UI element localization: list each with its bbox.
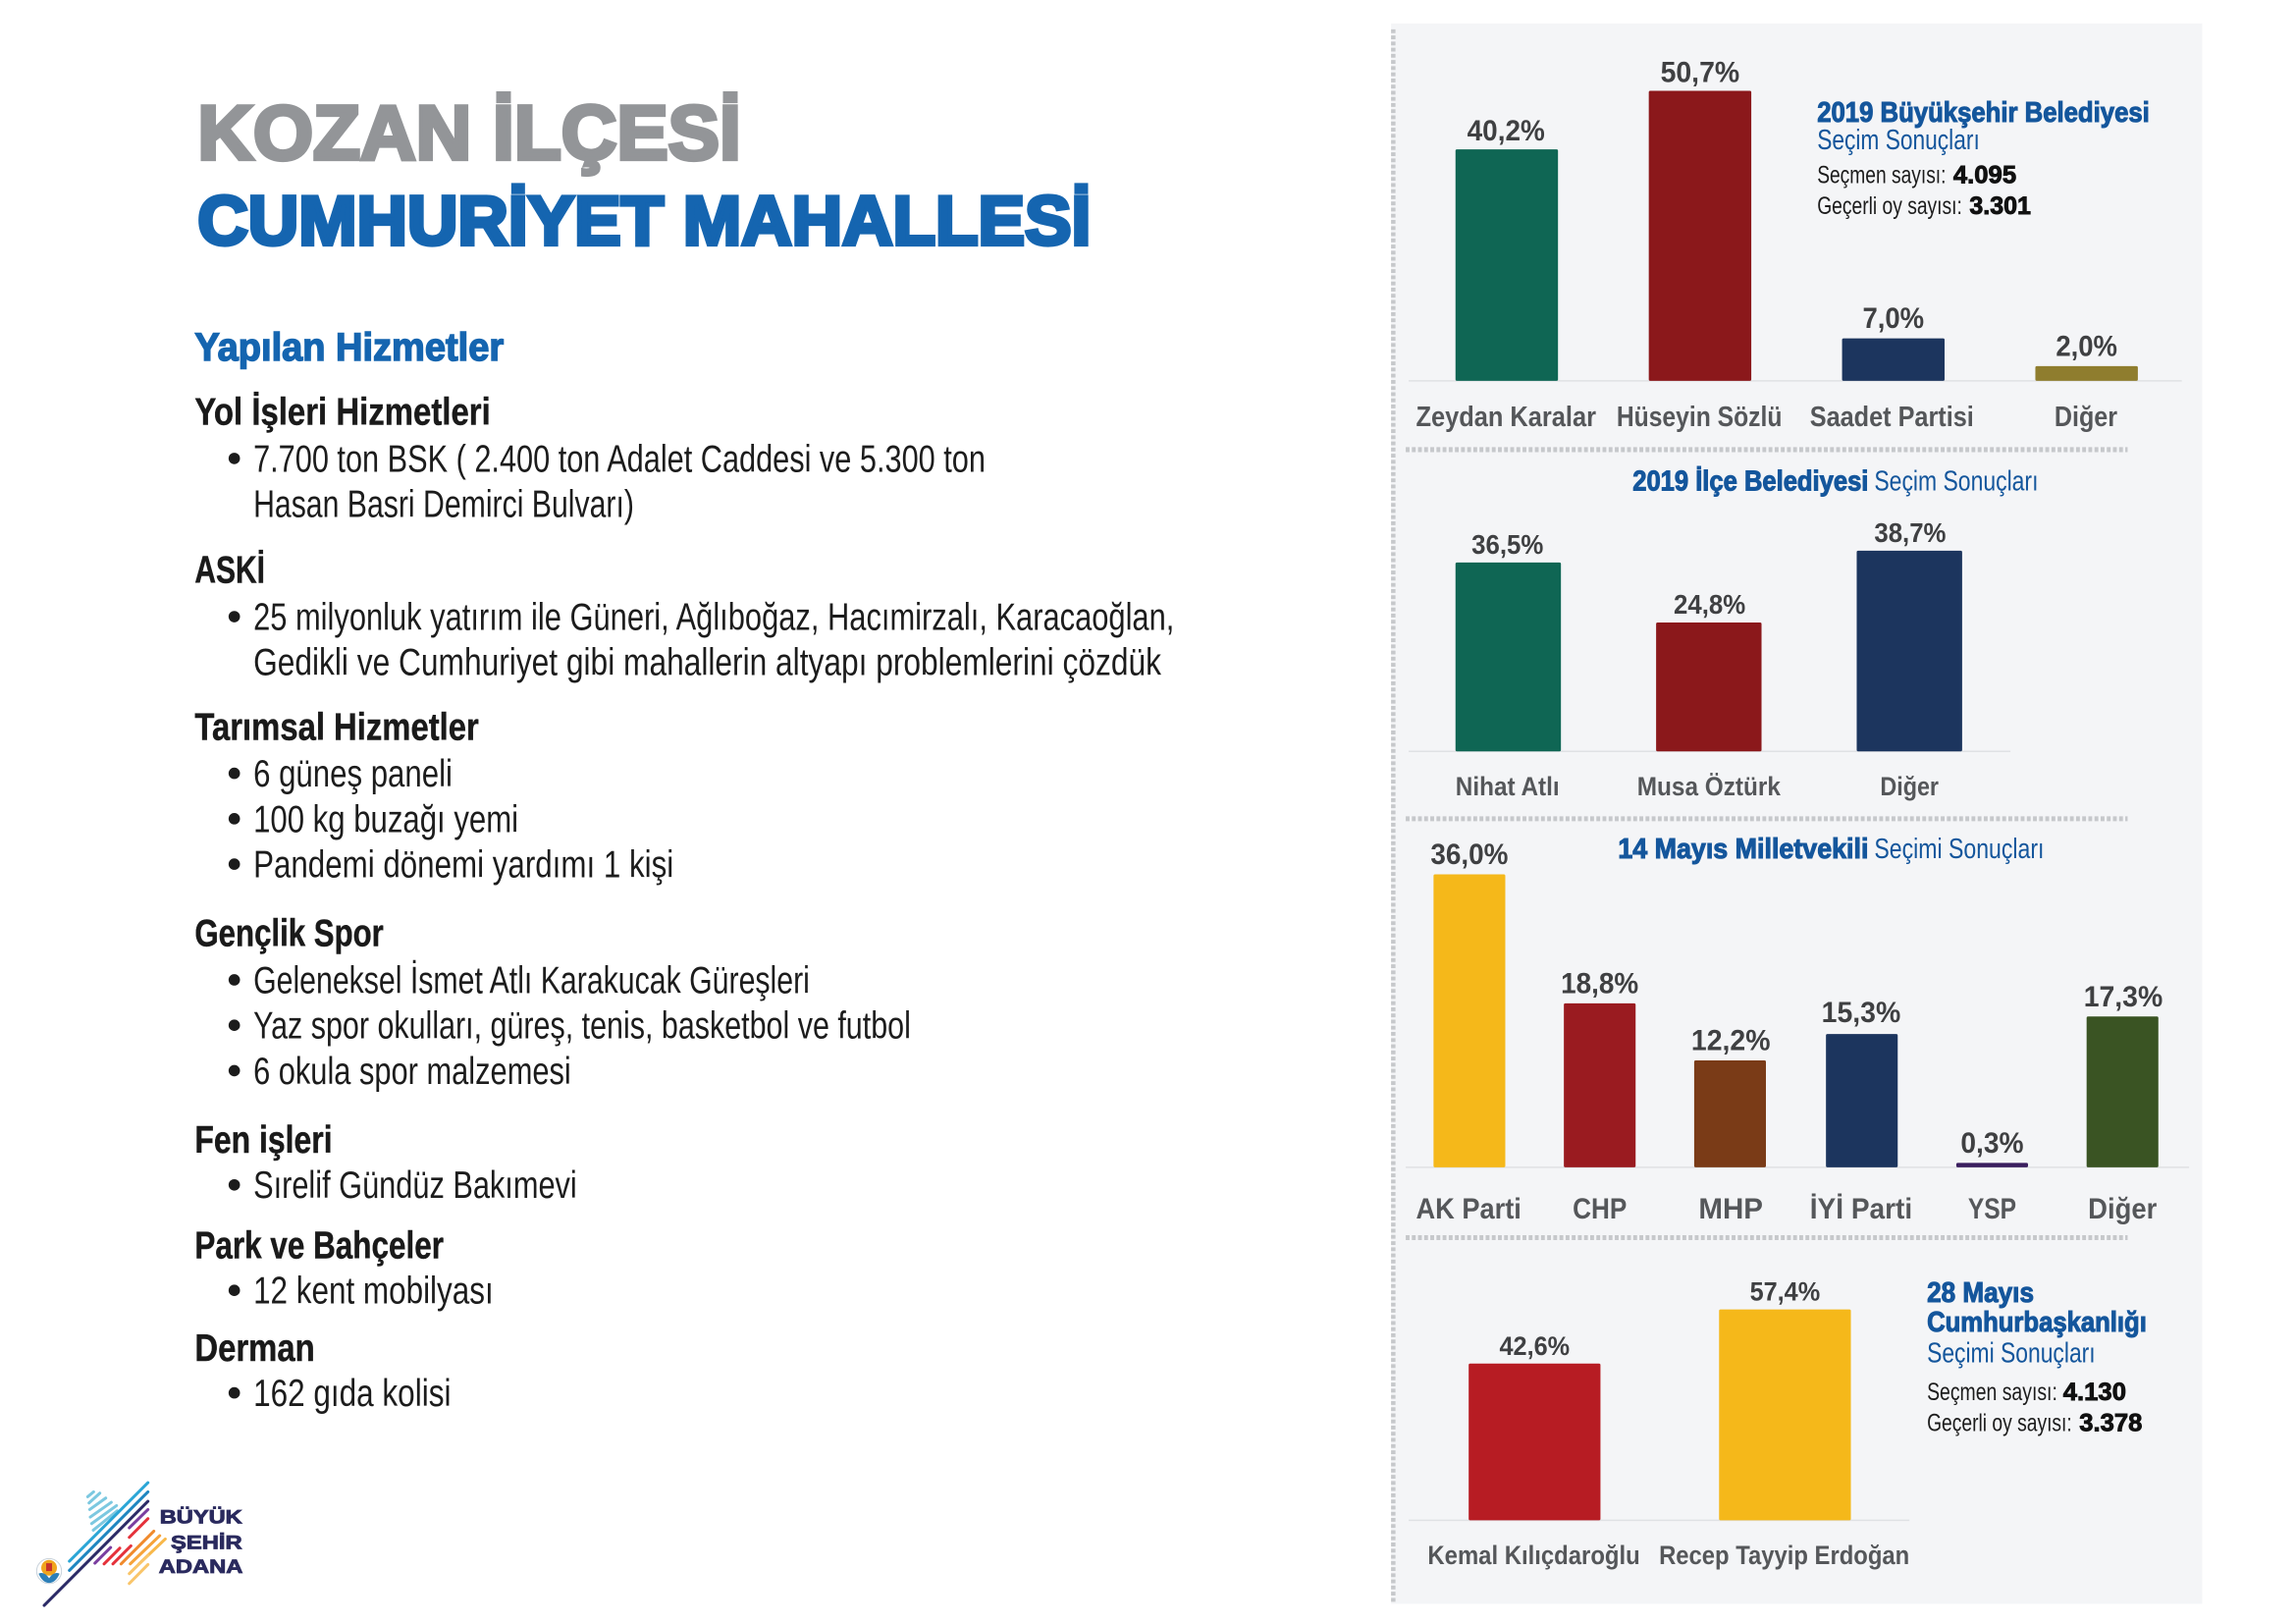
chart heading [1632,466,2038,498]
chart heading and voter counts: 4.130 [2063,1379,2126,1406]
chart heading and voter counts: 4.095 [1953,161,2016,189]
bar: Kemal Kılıçdaroğlu: Kemal Kılıçdaroğlu [1427,1541,1640,1570]
bar: Musa Öztürk: 24,8% [1674,589,1745,620]
title [197,91,1091,259]
bar: Recep Tayyip Erdoğan: Recep Tayyip Erdoğan [1659,1541,1909,1570]
chart heading and voter counts: 3.378 [2079,1409,2142,1436]
chart: 28 May presidential results [1409,1277,2147,1570]
section: parks and gardens: 12 kent mobilyası [253,1271,494,1313]
bar: Recep Tayyip Erdoğan [1659,1277,1909,1570]
chart heading [1618,834,2044,865]
section: road works [194,392,986,526]
section: Derman: Derman [194,1327,315,1370]
bar: AK Parti: AK Parti [1415,1193,1522,1225]
section: road works: 7.700 ton BSK ( 2.400 ton Adalet Caddesi ve 5.300 ton [253,438,986,480]
bar: Diğer: Diğer [2055,402,2117,433]
chart heading and voter counts: Geçerli oy sayısı: [1817,192,1962,220]
logo wordmark: ADANA [159,1557,242,1578]
section: ASKİ: ASKİ [194,550,265,592]
chart heading: Seçimi Sonuçları [1874,834,2044,865]
chart heading: 14 Mayıs Milletvekili [1618,834,1868,865]
bar: YSP [1956,1127,2028,1225]
section: agriculture: Pandemi dönemi yardımı 1 kişi [253,844,673,887]
section: youth and sports: Geleneksel İsmet Atlı Karakucak Güreşleri [253,959,810,1001]
logo: Büyükşehir Adana [36,1483,242,1605]
bar: Diğer: Diğer [2088,1193,2158,1225]
bar: Saadet Partisi: Saadet Partisi [1810,402,1974,433]
chart heading and voter counts: Seçmen sayısı: [1817,161,1946,189]
bar: Kemal Kılıçdaroğlu [1427,1331,1640,1570]
bar: İYİ Parti: İYİ Parti [1810,1193,1912,1225]
logo wordmark [159,1506,242,1578]
bar: MHP [1691,1025,1770,1225]
chart heading: 2019 İlçe Belediyesi [1632,466,1868,498]
bar: CHP [1561,967,1638,1225]
chart heading and voter counts: Cumhurbaşkanlığı [1927,1307,2147,1338]
chart heading and voter counts: 2019 Büyükşehir Belediyesi [1817,97,2150,129]
bar: Diğer: 2,0% [2056,330,2117,362]
section: Derman [194,1327,451,1415]
bar: Saadet Partisi: 7,0% [1862,302,1924,335]
bar: Hüseyin Sözlü [1617,57,1782,433]
bar: CHP: CHP [1573,1193,1627,1225]
chart: 2019 district municipality results [1409,466,2038,801]
chart heading and voter counts: Seçimi Sonuçları [1927,1337,2096,1369]
bar: Nihat Atlı [1456,529,1561,801]
bar: Diğer: Diğer [1880,772,1939,801]
section: parks and gardens [194,1224,494,1313]
bar: Nihat Atlı: 36,5% [1471,529,1543,560]
chart heading and voter counts: Seçim Sonuçları [1817,125,1980,156]
bar: Kemal Kılıçdaroğlu: 42,6% [1500,1331,1570,1361]
bar: YSP: YSP [1968,1193,2016,1225]
icon: municipal emblem [36,1558,62,1584]
section: agriculture: Tarımsal Hizmetler [194,706,479,748]
section: road works: Yol İşleri Hizmetleri [194,392,491,434]
bar: YSP: 0,3% [1960,1127,2024,1160]
chart heading: Seçim Sonuçları [1874,466,2038,498]
bar: Zeydan Karalar: 40,2% [1468,115,1545,147]
bar: CHP: 18,8% [1561,967,1638,1000]
section: public works [194,1119,577,1207]
bar: AK Parti [1415,839,1522,1225]
section: ASKİ: Gedikli ve Cumhuriyet gibi mahallerin altyapı problemlerini çözdük [253,642,1161,684]
section: youth and sports: 6 okula spor malzemesi [253,1051,571,1093]
section: youth and sports: Gençlik Spor [194,913,384,955]
bar: Saadet Partisi [1810,302,1974,433]
chart: 2019 metropolitan municipality results [1409,57,2182,433]
section: agriculture: 6 güneş paneli [253,753,453,795]
logo wordmark: ŞEHİR [171,1531,242,1553]
bar: Musa Öztürk: Musa Öztürk [1637,772,1781,801]
bar: Zeydan Karalar [1415,115,1596,433]
icon: star made of stripes [44,1483,165,1605]
heading: services: Yapılan Hizmetler [194,326,504,369]
bar: İYİ Parti [1810,997,1912,1225]
logo wordmark: BÜYÜK [160,1506,242,1529]
section: road works: Hasan Basri Demirci Bulvarı) [253,484,634,526]
bar: Hüseyin Sözlü: Hüseyin Sözlü [1617,402,1782,433]
bar: Musa Öztürk [1637,589,1781,801]
bar: MHP: MHP [1698,1193,1763,1225]
title: CUMHURİYET MAHALLESİ [197,183,1091,259]
chart heading and voter counts: 3.301 [1969,192,2031,220]
bar: MHP: 12,2% [1691,1025,1770,1057]
services list [194,392,1174,1415]
bar: Zeydan Karalar: Zeydan Karalar [1415,402,1596,433]
bar: Nihat Atlı: Nihat Atlı [1456,772,1560,801]
chart: 14 May parliamentary results [1406,834,2189,1225]
chart heading and voter counts: 28 Mayıs [1927,1277,2034,1309]
bar: Diğer: 38,7% [1874,517,1946,548]
panel: election results [1391,24,2203,1603]
section: public works: Fen işleri [194,1119,333,1162]
section: ASKİ: 25 milyonluk yatırım ile Güneri, Ağlıboğaz, Hacımirzalı, Karacaoğlan, [253,596,1174,638]
bar: Diğer [2035,330,2138,433]
chart heading and voter counts [1817,97,2150,220]
section: agriculture: 100 kg buzağı yemi [253,798,518,840]
section: agriculture [194,706,673,887]
title: KOZAN İLÇESİ [197,91,741,176]
chart heading and voter counts [1927,1277,2147,1436]
bar: Hüseyin Sözlü: 50,7% [1661,57,1739,89]
bar: Diğer: 17,3% [2084,981,2163,1013]
bar: AK Parti: 36,0% [1430,839,1508,871]
section: parks and gardens: Park ve Bahçeler [194,1224,444,1267]
bar: Diğer [1856,517,1962,801]
chart heading and voter counts: Geçerli oy sayısı: [1927,1409,2072,1436]
bar: İYİ Parti: 15,3% [1822,997,1900,1029]
section: youth and sports [194,913,911,1093]
section: Derman: 162 gıda kolisi [253,1373,451,1415]
chart heading and voter counts: Seçmen sayısı: [1927,1379,2057,1406]
section: ASKİ [194,550,1174,684]
section: public works: Sırelif Gündüz Bakımevi [253,1164,577,1207]
section: youth and sports: Yaz spor okulları, güreş, tenis, basketbol ve futbol [253,1005,911,1048]
bar: Recep Tayyip Erdoğan: 57,4% [1750,1277,1820,1307]
bar: Diğer [2084,981,2163,1225]
